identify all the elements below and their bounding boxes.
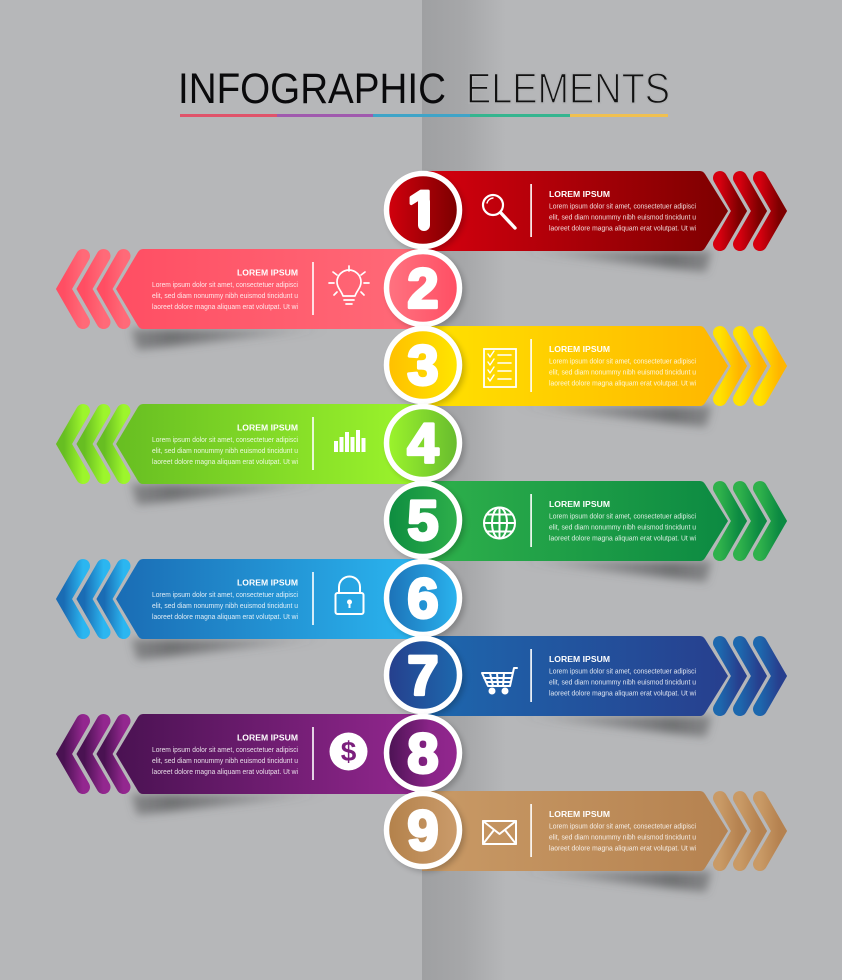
number badge 6 [386,562,465,640]
icon: magnifier [483,195,515,228]
row 9 banner: tan, envelope [422,791,779,892]
text block: laoreet dolore magna aliquam erat volutpat. Ut wi [152,459,298,466]
text block: Lorem ipsum dolor sit amet, consectetuer adipisci [152,592,298,599]
number badge 2 [386,252,465,330]
text block: elit, sed diam nonummy nibh euismod tincidunt u [152,448,298,455]
row 8 banner: purple, dollar [64,714,421,815]
text block: Lorem ipsum dolor sit amet, consectetuer adipisci [549,824,696,830]
text block: laoreet dolore magna aliquam erat volutpat. Ut wi [152,614,298,621]
text block [152,268,298,311]
row 5 banner: green, globe [422,481,779,582]
text block: Lorem ipsum dolor sit amet, consectetuer adipisci [152,282,298,289]
number badge 5 [386,484,465,562]
text block: Lorem ipsum dolor sit amet, consectetuer adipisci [549,668,696,676]
text block [549,809,696,852]
text block: laoreet dolore magna aliquam erat volutpat. Ut wi [549,536,696,542]
number badge 9 [386,794,465,872]
text block: LOREM IPSUM [237,732,298,742]
title: ELEMENTS [466,65,670,113]
number badge 7: 7 [407,644,439,706]
text block: LOREM IPSUM [237,422,298,432]
row 2 banner: coral, lightbulb [64,249,421,350]
number badge 4: 4 [407,412,439,474]
number badge 7 [386,638,465,717]
text block [152,578,298,621]
number badge 5: 5 [407,488,439,552]
text block: laoreet dolore magna aliquam erat volutpat. Ut wi [549,690,696,698]
number badge 8 [386,716,465,795]
title [178,65,670,113]
text block [152,422,298,466]
number badge 1: 1 [407,178,439,242]
text block: LOREM IPSUM [549,654,610,664]
icon: shopping cart [482,668,517,694]
text block: LOREM IPSUM [237,578,298,588]
text block: elit, sed diam nonummy nibh euismod tincidunt u [549,370,696,376]
text block [549,654,696,698]
number badge 6: 6 [407,566,439,630]
text block: elit, sed diam nonummy nibh euismod tincidunt u [549,214,696,222]
text block: Lorem ipsum dolor sit amet, consectetuer adipisci [152,437,298,444]
icon: lightbulb [329,266,369,304]
number badge 4 [386,406,465,485]
text block [549,499,696,542]
text block: LOREM IPSUM [549,499,610,509]
text block: LOREM IPSUM [549,344,610,354]
number badge 3 [386,328,465,407]
row 4 banner: lime, bar chart [64,404,421,505]
text block: elit, sed diam nonummy nibh euismod tincidunt u [152,293,298,300]
number badge 8: 8 [407,722,439,784]
text block [549,189,696,232]
text block: LOREM IPSUM [549,809,610,819]
text block: LOREM IPSUM [237,268,298,278]
row 6 banner: sky blue, padlock [64,559,421,660]
text block: elit, sed diam nonummy nibh euismod tincidunt u [152,758,298,765]
title: INFOGRAPHIC [178,65,446,113]
text block [152,732,298,776]
icon: checklist [484,349,516,387]
icon: dollar coin: $ [341,736,357,767]
icon: envelope [483,821,516,844]
number badge 9: 9 [407,798,439,862]
text block: elit, sed diam nonummy nibh euismod tincidunt u [152,603,298,610]
icon: padlock [336,576,364,614]
text block: elit, sed diam nonummy nibh euismod tincidunt u [549,680,696,686]
text block: laoreet dolore magna aliquam erat volutpat. Ut wi [152,769,298,776]
number badge 3: 3 [407,334,439,396]
icon: dollar coin [330,732,368,770]
text block: Lorem ipsum dolor sit amet, consectetuer adipisci [152,747,298,754]
number badge 2: 2 [407,256,439,320]
text block: laoreet dolore magna aliquam erat volutpat. Ut wi [549,846,696,852]
text block: elit, sed diam nonummy nibh euismod tincidunt u [549,834,696,842]
text block: laoreet dolore magna aliquam erat volutpat. Ut wi [549,226,696,232]
row 1 banner: red, search [422,171,779,272]
text block: LOREM IPSUM [549,189,610,199]
text block: Lorem ipsum dolor sit amet, consectetuer adipisci [549,204,696,210]
icon: globe [484,508,515,538]
text block: elit, sed diam nonummy nibh euismod tincidunt u [549,524,696,532]
text block [549,344,696,388]
text block: Lorem ipsum dolor sit amet, consectetuer adipisci [549,514,696,520]
text block: laoreet dolore magna aliquam erat volutpat. Ut wi [152,304,298,311]
title underline [180,114,668,117]
row 3 banner: yellow, checklist [422,326,779,427]
number badge 1 [386,174,465,252]
icon: bar chart [334,430,366,452]
text block: Lorem ipsum dolor sit amet, consectetuer adipisci [549,358,696,366]
row 7 banner: navy, cart [422,636,779,737]
text block: laoreet dolore magna aliquam erat volutpat. Ut wi [549,380,696,388]
